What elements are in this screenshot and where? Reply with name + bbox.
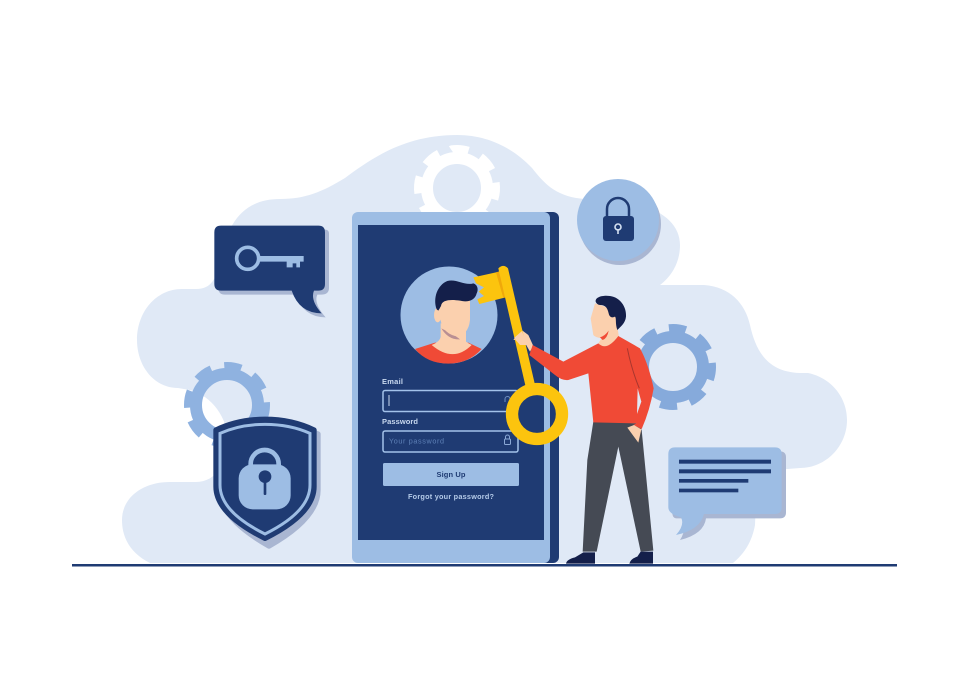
email label: Email [382,377,403,386]
neck shadow [441,328,460,339]
icon: padlock [239,450,291,509]
email field [383,390,518,412]
phone back edge [420,212,559,563]
gear: left blue [186,364,268,446]
avatar face [440,300,470,336]
mouth [600,331,609,340]
icon: padlock [603,198,634,241]
icon: key [237,247,304,269]
password field [383,431,518,452]
sign up button: Sign Up [436,470,466,479]
person [513,296,654,564]
sweater fold [627,348,639,388]
ear [434,308,441,322]
lock badge [577,179,661,265]
avatar neck [432,323,472,354]
shield with lock [216,419,318,546]
password field: Your password [389,436,444,446]
shoes [566,552,653,564]
speech bubble: text lines [668,447,786,540]
ground line [72,564,897,566]
key ring [512,389,562,439]
password label: Password [382,417,418,426]
hand in pocket [627,425,641,443]
key head shade [496,271,509,298]
avatar sweater [415,343,482,364]
gear: right blue [631,325,715,409]
sign up button [383,463,519,486]
key shaft [498,266,535,385]
phone body [352,212,550,563]
key head [473,272,506,304]
phone [352,212,559,563]
trousers [583,422,653,552]
hand on key [513,330,533,352]
neck and face [591,303,619,349]
fingers over key [514,331,527,345]
sweater [529,336,654,429]
phone screen [358,225,544,540]
avatar [400,266,498,364]
speech bubble: key [214,226,329,317]
hair [596,296,626,330]
text lines [679,460,771,492]
gear: top white [414,145,500,231]
forgot password link: Forgot your password? [408,492,495,501]
icon: small lock [504,435,510,444]
golden key [473,266,562,439]
avatar hair [435,281,478,311]
gap between arm and torso [637,388,641,414]
background cloud [122,135,847,563]
